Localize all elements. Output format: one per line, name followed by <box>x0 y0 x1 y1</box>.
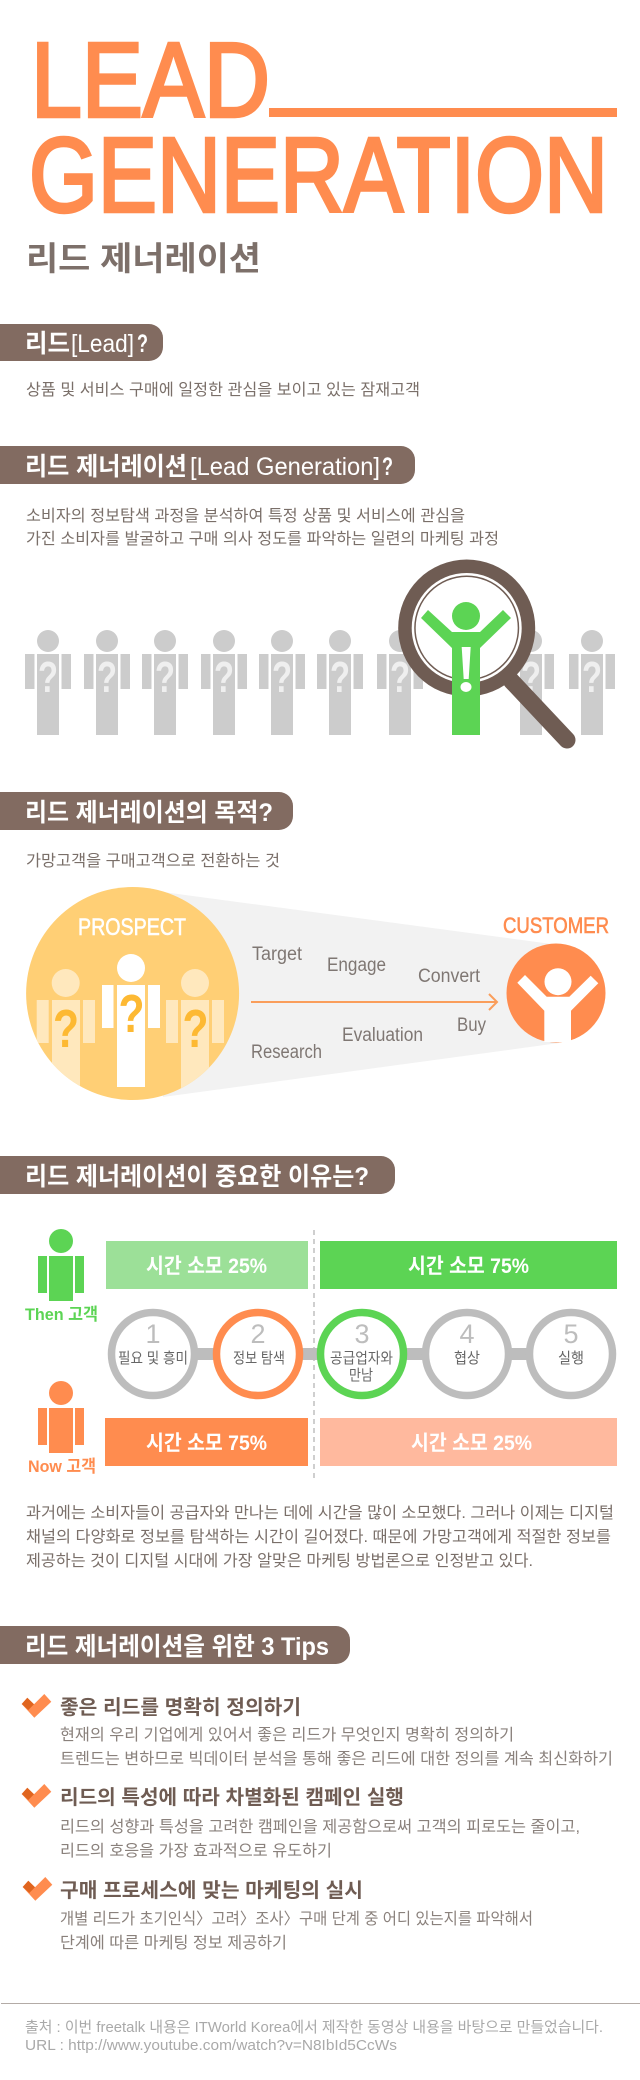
bar: now 75 percent: 시간 소모 75% <box>146 1432 267 1455</box>
text: explanation: 제공하는 것이 디지털 시대에 가장 알맞은 마케팅 방법론으로 인정받고 있다. <box>26 1552 533 1570</box>
text: purpose: 가망고객을 구매고객으로 전환하는 것 <box>26 852 280 870</box>
process chain: 만남 <box>349 1367 373 1384</box>
process chain: 실행 <box>558 1350 584 1367</box>
text: lead generation definition: 가진 소비자를 발굴하고 구매 의사 정도를 파악하는 일련의 마케팅 과정 <box>26 530 499 548</box>
section heading: Lead Generation: 리드 제너레이션 <box>25 453 187 481</box>
text: lead definition: 상품 및 서비스 구매에 일정한 관심을 보이고 있는 잠재고객 <box>26 381 420 399</box>
section heading: Lead: 리드 <box>25 330 70 358</box>
funnel band <box>163 892 559 1097</box>
bar: then 25 percent <box>106 1241 308 1289</box>
process chain <box>112 1312 612 1396</box>
process chain: 1 <box>145 1319 161 1349</box>
bar: now 25 percent <box>320 1418 617 1466</box>
figure row: grey prospects: ? <box>38 653 58 702</box>
section heading: purpose: 리드 제너레이션의 목적? <box>25 799 273 827</box>
tip 3: 구매 프로세스에 맞는 마케팅의 실시 <box>60 1879 363 1902</box>
title: Lead Generation: LEAD <box>31 22 270 140</box>
tip 2 <box>22 1784 580 1860</box>
source footer: 출처 : 이번 freetalk 내용은 ITWorld Korea에서 제작한 동영상 내용을 바탕으로 만들었습니다. <box>25 2019 603 2036</box>
tip 2: 리드의 성향과 특성을 고려한 캠페인을 제공함으로써 고객의 피로도는 줄이고, <box>60 1818 580 1836</box>
tip 1: 트렌드는 변하므로 빅데이터 분석을 통해 좋은 리드에 대한 정의를 계속 최신화하기 <box>60 1750 613 1768</box>
source footer <box>25 2019 603 2054</box>
funnel stage labels: Research <box>251 1042 322 1063</box>
figure row: grey prospects: ? <box>155 653 175 702</box>
process chain: 협상 <box>454 1350 480 1367</box>
figure row: grey prospects: ? <box>214 653 234 702</box>
section heading: tips: 리드 제너레이션을 위한 3 Tips <box>25 1633 329 1661</box>
figure row: grey prospects: ? <box>582 653 602 702</box>
process chain: 3 <box>354 1319 370 1349</box>
section heading: Lead Generation <box>0 446 415 484</box>
tip 2: 리드의 호응을 가장 효과적으로 유도하기 <box>60 1842 332 1860</box>
funnel stage labels: Convert <box>418 966 481 987</box>
section heading: Lead: [Lead] <box>71 330 134 358</box>
prospect circle: ? <box>182 999 208 1059</box>
tip 2: 리드의 특성에 따라 차별화된 캠페인 실행 <box>60 1786 404 1809</box>
process chain: 정보 탐색 <box>233 1350 285 1367</box>
section heading: tips <box>0 1626 350 1664</box>
section heading: Lead Generation: ? <box>382 453 393 481</box>
figure row: grey prospects: ? <box>97 653 117 702</box>
tip 1: 현재의 우리 기업에게 있어서 좋은 리드가 무엇인지 명확히 정의하기 <box>60 1726 514 1744</box>
funnel stage labels: Engage <box>327 955 386 976</box>
funnel stage labels: Target <box>252 944 303 965</box>
figure row: grey prospects: ? <box>521 653 541 702</box>
arrow <box>251 994 497 1010</box>
icon: then customer: Then 고객 <box>25 1305 98 1324</box>
icon: then customer <box>25 1229 98 1324</box>
funnel stage labels: Evaluation <box>342 1025 423 1046</box>
tip 3: 개별 리드가 초기인식〉고려〉조사〉구매 단계 중 어디 있는지를 파악해서 <box>60 1910 533 1928</box>
funnel stage labels <box>251 944 486 1063</box>
tip 3: 단계에 따른 마케팅 정보 제공하기 <box>60 1934 287 1952</box>
bar: now 75 percent <box>105 1418 308 1466</box>
subtitle: 리드 제너레이션 <box>26 240 261 277</box>
icon: now customer: Now 고객 <box>28 1457 96 1476</box>
icon: now customer <box>28 1381 96 1476</box>
process chain: 5 <box>563 1319 579 1349</box>
process chain: 2 <box>250 1319 266 1349</box>
icon: customer <box>506 944 606 1042</box>
section heading: purpose <box>0 792 293 830</box>
tip 1 <box>22 1694 613 1768</box>
title: Lead Generation <box>29 22 616 234</box>
bar: then 75 percent: 시간 소모 75% <box>408 1255 529 1278</box>
process chain: 4 <box>459 1319 475 1349</box>
customer label: CUSTOMER <box>503 913 609 938</box>
figure row: grey prospects <box>25 630 615 735</box>
section heading: importance <box>0 1156 395 1194</box>
section heading: Lead <box>0 324 163 361</box>
figure row: grey prospects: ? <box>330 653 350 702</box>
bar: then 75 percent <box>320 1241 617 1289</box>
tip 1: 좋은 리드를 명확히 정의하기 <box>60 1696 301 1719</box>
figure row: grey prospects: ? <box>272 653 292 702</box>
prospect circle: ? <box>53 999 79 1059</box>
prospect circle: PROSPECT <box>78 914 186 941</box>
section heading: Lead: ? <box>137 330 148 358</box>
funnel stage labels: Buy <box>457 1015 486 1036</box>
section heading: importance: 리드 제너레이션이 중요한 이유는? <box>25 1163 369 1191</box>
text: lead generation definition: 소비자의 정보탐색 과정을 분석하여 특정 상품 및 서비스에 관심을 <box>26 507 465 525</box>
prospect circle: ? <box>118 984 144 1044</box>
process chain: 공급업자와 <box>330 1350 393 1367</box>
text: explanation <box>26 1504 614 1570</box>
tip 3 <box>23 1877 533 1952</box>
process chain: 필요 및 흥미 <box>118 1349 188 1367</box>
section heading: Lead Generation: [Lead Generation] <box>190 453 380 481</box>
bar: then 25 percent: 시간 소모 25% <box>146 1255 267 1278</box>
figure row: grey prospects: ? <box>390 653 410 702</box>
bar: now 25 percent: 시간 소모 25% <box>411 1432 532 1455</box>
text: explanation: 채널의 다양화로 정보를 탐색하는 시간이 길어졌다. 때문에 가망고객에게 적절한 정보를 <box>26 1528 611 1546</box>
text: explanation: 과거에는 소비자들이 공급자와 만나는 데에 시간을 많이 소모했다. 그러나 이제는 디지털 <box>26 1504 614 1522</box>
source footer: URL : http://www.youtube.com/watch?v=N8IbId5CcWs <box>25 2037 397 2054</box>
prospect circle <box>26 887 239 1110</box>
icon: magnifying glass with green figure <box>398 560 567 740</box>
text: lead generation definition <box>26 507 499 548</box>
